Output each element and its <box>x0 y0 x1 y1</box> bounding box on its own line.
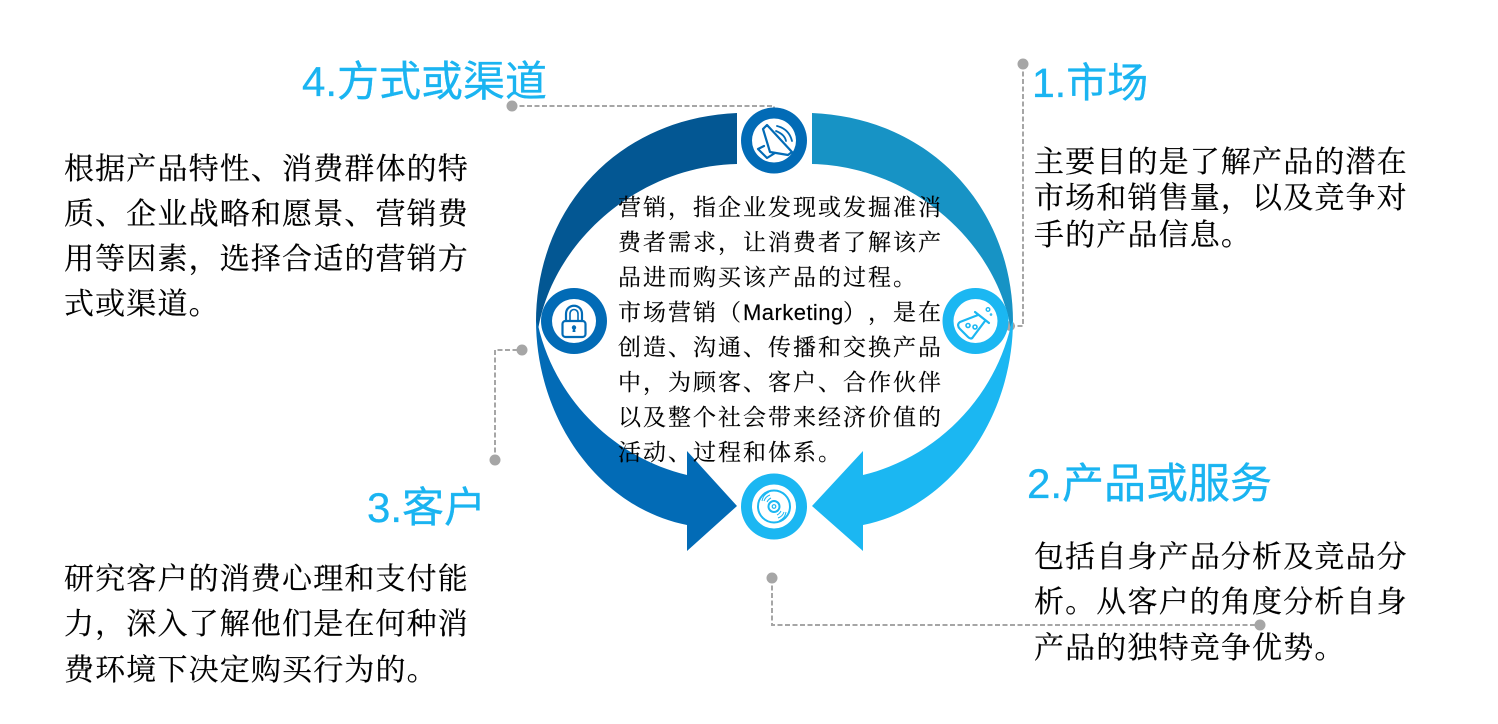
text: customer <box>64 563 469 687</box>
arrow: bottom left <box>536 320 737 551</box>
text: market: 市场和销售量，以及竞争对 <box>1034 182 1408 215</box>
icon: speaker <box>741 108 807 174</box>
heading: 3 customer: 3.客户 <box>367 484 486 531</box>
icon: padlock <box>541 288 607 354</box>
center description: 品进而购买该产品的过程。 <box>618 265 918 290</box>
text: market: 主要目的是了解产品的潜在 <box>1034 146 1408 179</box>
center description: 营销，指企业发现或发掘准消 <box>618 195 943 221</box>
text: channels: 质、企业战略和愿景、营销费 <box>64 198 469 231</box>
center description: 中，为顾客、客户、合作伙伴 <box>618 370 943 396</box>
text: market: 手的产品信息。 <box>1034 219 1252 252</box>
center description: 费者需求，让消费者了解该产 <box>618 230 943 256</box>
icon: flask <box>942 288 1008 354</box>
text: customer: 研究客户的消费心理和支付能 <box>64 563 469 596</box>
heading: 2 product: 2.产品或服务 <box>1027 460 1272 507</box>
text: product: 包括自身产品分析及竞品分 <box>1034 541 1408 574</box>
connector: customer <box>490 344 528 466</box>
text: channels <box>64 153 469 321</box>
connector: channel <box>506 100 774 112</box>
center description <box>618 195 943 465</box>
center description: 是在 <box>893 300 943 325</box>
center description: 市场营销（ <box>618 300 743 325</box>
arrow: bottom right <box>812 320 1013 551</box>
cycle segment: top right <box>812 113 1013 330</box>
center description: 创造、沟通、传播和交换产品 <box>618 335 943 360</box>
connector: market <box>1005 58 1028 331</box>
connector: product <box>766 572 1266 630</box>
center description: 活动、过程和体系。 <box>618 440 843 465</box>
text: product <box>1034 541 1408 665</box>
text: product: 析。从客户的角度分析自身 <box>1034 586 1408 619</box>
text: channels: 根据产品特性、消费群体的特 <box>64 153 469 186</box>
text: market <box>1034 146 1408 252</box>
icon: disc <box>741 474 807 540</box>
text: customer: 费环境下决定购买行为的。 <box>64 654 438 687</box>
center description: ） <box>843 300 868 325</box>
heading: 4 channels: 4.方式或渠道 <box>302 58 547 105</box>
text: channels: 用等因素，选择合适的营销方 <box>64 243 469 276</box>
heading: 1 market: 1.市场 <box>1032 60 1148 106</box>
center description: ， <box>868 300 893 326</box>
text: channels: 式或渠道。 <box>64 288 220 321</box>
center description: Marketing <box>743 300 844 325</box>
cycle segment: top left <box>536 113 737 330</box>
text: customer: 力，深入了解他们是在何种消 <box>64 608 469 641</box>
text: product: 产品的独特竞争优势。 <box>1034 632 1346 665</box>
center description: 以及整个社会带来经济价值的 <box>618 405 943 430</box>
